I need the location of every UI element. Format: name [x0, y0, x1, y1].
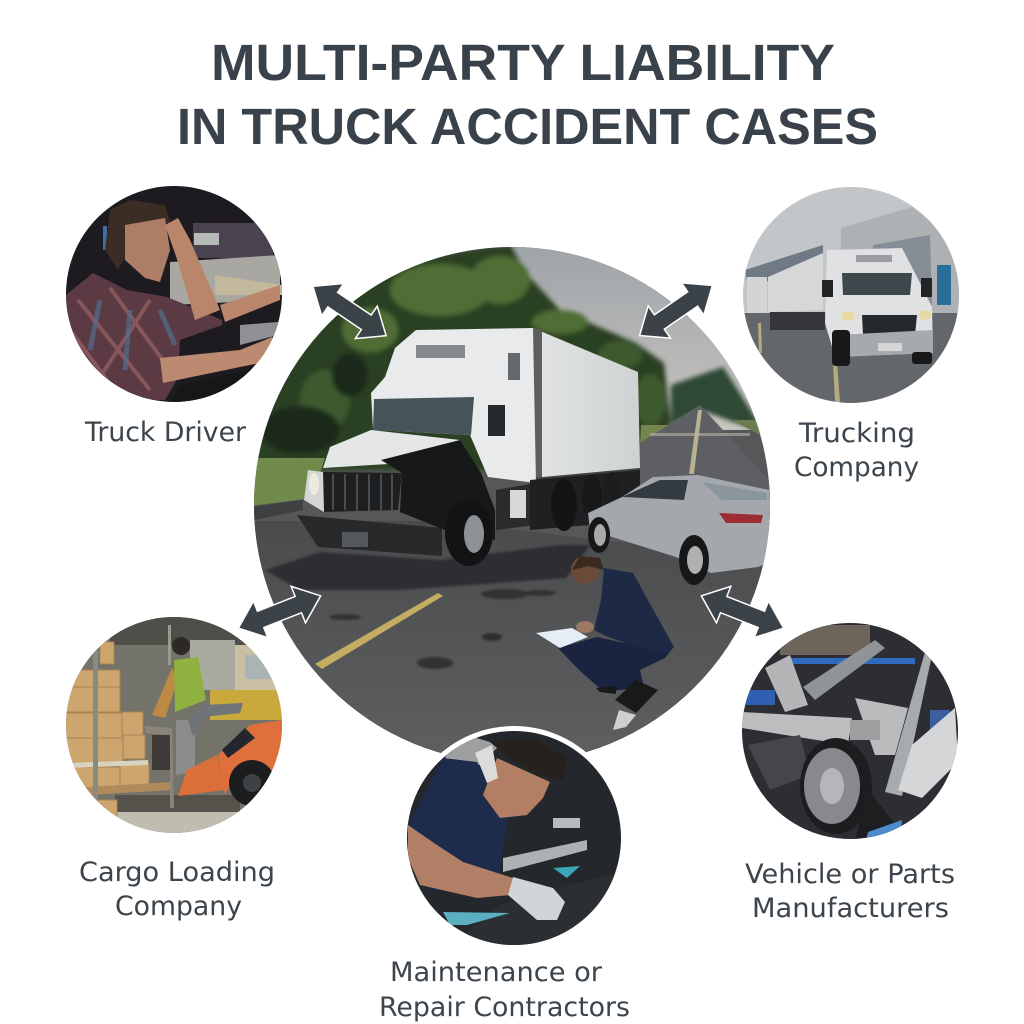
circle: truck driver: [66, 186, 282, 402]
label: vehicle or parts manufacturers: [745, 859, 955, 924]
mechanic's shirt: [408, 758, 507, 890]
boxes: [65, 642, 149, 820]
grass: [250, 458, 325, 506]
title: MULTI-PARTY LIABILITY: [211, 34, 835, 91]
wheels: [445, 470, 640, 566]
white truck: [825, 248, 933, 357]
label: trucking company: Trucking: [798, 418, 915, 449]
driver's lower arm: [160, 337, 275, 383]
trailers: [747, 277, 767, 313]
mechanic's arm: [408, 825, 513, 898]
title: [177, 34, 878, 155]
hood parts: [503, 840, 587, 872]
driver's head: [125, 218, 170, 282]
debris: [265, 545, 590, 669]
circle: cargo loading company: [66, 617, 282, 833]
label: trucking company: Company: [794, 452, 919, 483]
far road: [640, 405, 775, 530]
worker: [152, 637, 206, 775]
glove: [508, 877, 565, 920]
title: IN TRUCK ACCIDENT CASES: [177, 98, 878, 155]
circle: vehicle or parts manufacturers: [738, 620, 963, 845]
arrow: top-left: [304, 272, 395, 350]
arrow: bottom-right: [696, 580, 789, 644]
circle: trucking company: [735, 185, 965, 405]
label: cargo loading company: [79, 857, 275, 922]
label: maintenance or repair contractors: Repair Contractors: [379, 992, 630, 1023]
sky: [500, 247, 756, 430]
hood: [323, 430, 460, 468]
driver's hair: [105, 200, 170, 270]
crushed fender: [381, 440, 495, 540]
guard rail: [254, 500, 303, 520]
white ring and circle: maintenance or repair contractors: [402, 726, 626, 950]
trailer: [533, 328, 640, 478]
mechanic's head: [483, 758, 550, 818]
label: cargo loading company: Company: [115, 891, 242, 922]
label: maintenance or repair contractors: Maintenance or: [390, 957, 603, 988]
label: truck driver: Truck Driver: [84, 417, 247, 448]
trees: [250, 244, 762, 470]
silver car: [588, 475, 775, 573]
driver's raised arm: [165, 218, 220, 320]
arrow: top-right: [630, 271, 722, 350]
forklift: [178, 755, 225, 796]
yellow line: [315, 593, 443, 669]
foreground road: [250, 521, 775, 770]
arrow: bottom-left: [233, 580, 326, 644]
truck cab: [371, 328, 536, 483]
label: vehicle or parts manufacturers: Vehicle or Parts: [745, 859, 955, 890]
grille and bumper: [323, 472, 402, 512]
inspector: [536, 556, 674, 730]
central photo: truck accident scene: [250, 240, 775, 770]
label: cargo loading company: Cargo Loading: [79, 857, 275, 888]
label: trucking company: [794, 418, 919, 483]
driver's shirt: [66, 273, 222, 400]
steering wheel: [240, 322, 278, 345]
label: maintenance or repair contractors: [379, 957, 630, 1023]
label: vehicle or parts manufacturers: Manufacturers: [752, 893, 949, 924]
